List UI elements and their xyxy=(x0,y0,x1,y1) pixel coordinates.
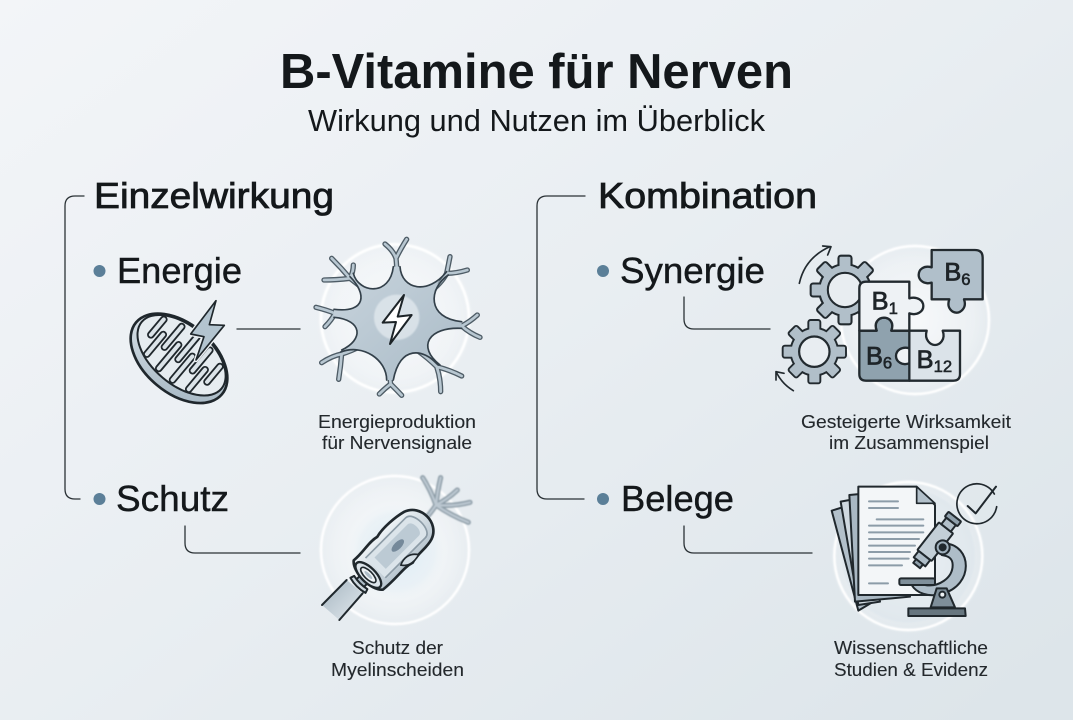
puzzle piece: B1: 1 xyxy=(889,299,898,318)
caption: Studien & Evidenz: Studien & Evidenz xyxy=(834,660,988,680)
puzzle piece: B12 xyxy=(909,331,960,381)
bullet: Synergie xyxy=(597,265,609,277)
connector: Schutz xyxy=(185,526,300,553)
caption: für Nervensignale: für Nervensignale xyxy=(322,433,472,453)
subtitle: Wirkung und Nutzen im Überblick xyxy=(308,103,765,138)
puzzle piece: B6 top right xyxy=(919,250,983,313)
icon: lower gear xyxy=(784,321,845,382)
label: Belege: Belege xyxy=(621,478,734,519)
bracket: Einzelwirkung xyxy=(65,196,84,499)
bullet: Energie xyxy=(94,265,106,277)
icon: neuron with lightning bolt xyxy=(315,238,480,398)
icon: documents, microscope and check mark xyxy=(830,478,997,635)
heading: Einzelwirkung: Einzelwirkung xyxy=(94,175,334,216)
arrow: upper gear rotation xyxy=(799,246,831,283)
icon: upper gear xyxy=(812,257,878,323)
puzzle piece: B6 lower left: B xyxy=(866,343,883,371)
connector: Energie xyxy=(237,328,300,330)
puzzle piece: B6 lower left xyxy=(859,318,909,381)
bullet: Schutz xyxy=(94,493,106,505)
connector: Synergie xyxy=(684,297,770,329)
bracket: Kombination xyxy=(537,196,585,499)
bullet: Belege xyxy=(597,493,609,505)
heading: Kombination: Kombination xyxy=(598,175,817,216)
back pages xyxy=(832,493,910,611)
microscope xyxy=(899,511,966,616)
arrow: lower gear rotation xyxy=(776,372,793,391)
puzzle piece: B6 top right: 6 xyxy=(961,270,971,289)
icon: mitochondrion with lightning bolt xyxy=(114,296,244,421)
caption: Myelinscheiden: Myelinscheiden xyxy=(331,660,464,680)
icon: myelin sheath xyxy=(317,472,473,628)
text lines xyxy=(869,501,923,583)
puzzle piece: B1 xyxy=(859,282,923,331)
puzzle piece: B12: 12 xyxy=(934,357,952,376)
caption: Schutz der: Schutz der xyxy=(352,638,443,658)
panel: Einzelwirkung xyxy=(65,175,480,680)
caption: Energieproduktion: Energieproduktion xyxy=(318,412,476,432)
icon: puzzle pieces and gears xyxy=(776,242,993,398)
puzzle piece: B6 lower left: 6 xyxy=(883,354,892,373)
puzzle piece: B6 top right: B xyxy=(944,259,961,287)
connector: Belege xyxy=(684,526,812,553)
caption: im Zusammenspiel: im Zusammenspiel xyxy=(829,433,989,453)
caption: Wissenschaftliche: Wissenschaftliche xyxy=(834,638,988,658)
check mark xyxy=(957,484,997,524)
panel: Kombination xyxy=(537,175,1011,680)
front page xyxy=(858,487,935,595)
title: B-Vitamine für Nerven xyxy=(280,45,793,99)
puzzle piece: B12: B xyxy=(917,346,934,374)
caption: Gesteigerte Wirksamkeit: Gesteigerte Wirksamkeit xyxy=(801,412,1011,432)
label: Synergie: Synergie xyxy=(620,250,765,291)
puzzle piece: B1: B xyxy=(872,287,889,315)
label: Energie: Energie xyxy=(117,250,242,291)
label: Schutz: Schutz xyxy=(116,478,229,519)
